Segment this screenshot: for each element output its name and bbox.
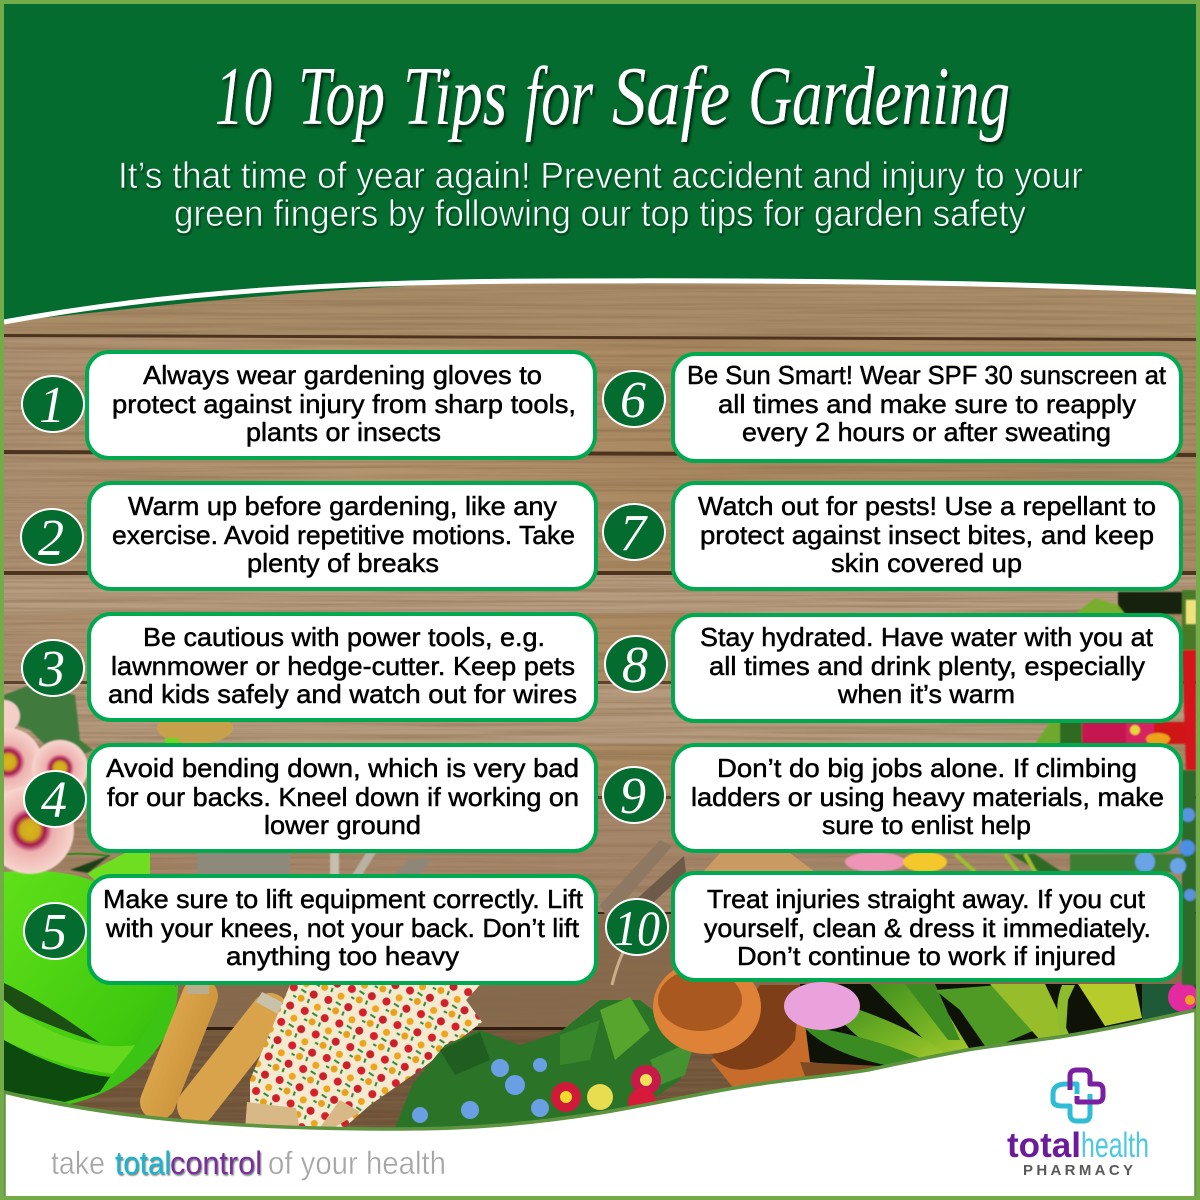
tagline: take xyxy=(51,1145,105,1181)
card 6 xyxy=(673,354,1181,461)
wordmark: total xyxy=(1007,1126,1081,1165)
number badge 1: 1 xyxy=(39,377,65,434)
tagline xyxy=(51,1145,446,1181)
number badge 5 xyxy=(24,903,86,961)
card 4: Avoid bending down, which is very bad xyxy=(106,753,579,783)
number badge 9 xyxy=(603,767,665,825)
card 4 xyxy=(89,745,596,851)
card 7: Watch out for pests! Use a repellant to xyxy=(698,491,1156,521)
number badge 5: 5 xyxy=(41,904,67,961)
card 10 xyxy=(673,873,1181,980)
subtitle xyxy=(118,155,1083,234)
card 1: Always wear gardening gloves to xyxy=(143,360,542,390)
tip 9 xyxy=(603,745,1181,851)
photo: rusty tools and twine xyxy=(600,840,815,985)
photo: flowers and foliage, right side xyxy=(845,590,1196,985)
tagline: control xyxy=(170,1145,262,1181)
card 5: Make sure to lift equipment correctly. Lift xyxy=(103,884,584,914)
card 7 xyxy=(673,483,1181,589)
tip 5 xyxy=(24,876,596,983)
number badge 8: 8 xyxy=(622,637,648,694)
card 2 xyxy=(89,483,596,589)
number badge 9: 9 xyxy=(620,768,646,825)
photo: green plant and flowers, centre bottom xyxy=(394,997,695,1130)
card 3: and kids safely and watch out for wires xyxy=(108,679,577,709)
number badge 6: 6 xyxy=(620,372,646,429)
pharmacy label: PHARMACY xyxy=(1023,1162,1133,1179)
number badge 7 xyxy=(603,504,665,562)
tagline: of your health xyxy=(268,1145,446,1181)
number badge 10: 10 xyxy=(614,900,660,956)
card 9: ladders or using heavy materials, make xyxy=(691,782,1164,812)
title: Top xyxy=(298,50,385,143)
card 4: lower ground xyxy=(264,810,421,840)
card 9 xyxy=(673,745,1181,851)
tip 4 xyxy=(24,745,596,851)
card 1 xyxy=(87,352,595,458)
number badge 3 xyxy=(22,640,84,698)
card 9: sure to enlist help xyxy=(822,810,1031,840)
white footer panel with green curved edge xyxy=(4,1010,1196,1200)
logo: total health pharmacy xyxy=(1007,1070,1149,1179)
card 2: plenty of breaks xyxy=(247,548,439,578)
white curve under header xyxy=(4,281,1196,322)
card 7: protect against insect bites, and keep xyxy=(700,520,1154,550)
title: Tips xyxy=(403,50,507,143)
card 4: for our backs. Kneel down if working on xyxy=(107,782,579,812)
number badge 7: 7 xyxy=(620,505,648,562)
card 1: plants or insects xyxy=(246,417,441,447)
number badge 4: 4 xyxy=(41,772,67,829)
card 10: Don’t continue to work if injured xyxy=(737,941,1116,971)
card 3 xyxy=(89,614,596,720)
number badge 3: 3 xyxy=(38,641,65,698)
card 6: all times and make sure to reapply xyxy=(718,389,1136,419)
photo: trowel handles xyxy=(158,984,284,1106)
card 8: Stay hydrated. Have water with you at xyxy=(700,622,1154,652)
photo: gardening gloves xyxy=(245,985,482,1130)
tip 8 xyxy=(605,615,1181,721)
card 8 xyxy=(673,615,1181,721)
tip 3 xyxy=(22,614,596,720)
background: wood planks and garden photo xyxy=(0,270,1200,1140)
wordmark: health xyxy=(1081,1126,1149,1165)
tip 10 xyxy=(606,873,1181,980)
title: 10 xyxy=(215,50,272,143)
card 3: Be cautious with power tools, e.g. xyxy=(143,622,545,652)
tip 6 xyxy=(603,354,1181,461)
card 5: with your knees, not your back. Don’t lift xyxy=(105,913,580,943)
number badge 8 xyxy=(605,636,667,694)
card 5 xyxy=(89,876,596,983)
card 3: lawnmower or hedge-cutter. Keep pets xyxy=(111,651,575,681)
number badge 2 xyxy=(21,509,83,567)
tip 1 xyxy=(22,352,595,458)
title: Safe xyxy=(612,50,730,143)
card 9: Don’t do big jobs alone. If climbing xyxy=(717,753,1137,783)
subtitle: It’s that time of year again! Prevent accident and injury to your xyxy=(118,155,1083,196)
number badge 1 xyxy=(22,376,84,434)
photo: hyacinth and blade leaves, bottom right xyxy=(784,982,1198,1076)
green header panel xyxy=(0,0,1200,323)
wordmark xyxy=(1007,1126,1149,1165)
title xyxy=(215,50,1010,143)
card 5: anything too heavy xyxy=(226,941,459,971)
card 2: Warm up before gardening, like any xyxy=(128,491,557,521)
title: for xyxy=(525,50,593,143)
photo: primrose flowers and leaves, left xyxy=(0,685,432,876)
number badge 6 xyxy=(603,371,665,429)
photo: watering can xyxy=(4,712,233,1104)
card 10: Treat injuries straight away. If you cut xyxy=(707,884,1146,914)
card 6: Be Sun Smart! Wear SPF 30 sunscreen at xyxy=(687,360,1167,390)
icon: interlocked cross xyxy=(1053,1070,1103,1121)
photo: terracotta pots xyxy=(653,960,842,1092)
number badge 4 xyxy=(24,771,86,829)
card 1: protect against injury from sharp tools, xyxy=(112,389,576,419)
card 10: yourself, clean & dress it immediately. xyxy=(704,913,1151,943)
card 8: when it’s warm xyxy=(837,679,1015,709)
card 8: all times and drink plenty, especially xyxy=(709,651,1145,681)
card 6: every 2 hours or after sweating xyxy=(742,417,1111,447)
number badge 2: 2 xyxy=(38,510,64,567)
tip 7 xyxy=(603,483,1181,589)
tagline: total xyxy=(115,1145,171,1181)
title: Gardening xyxy=(748,50,1010,143)
subtitle: green fingers by following our top tips for garden safety xyxy=(174,193,1026,234)
card 2: exercise. Avoid repetitive motions. Take xyxy=(112,520,575,550)
card 7: skin covered up xyxy=(831,548,1022,578)
tip 2 xyxy=(21,483,596,589)
